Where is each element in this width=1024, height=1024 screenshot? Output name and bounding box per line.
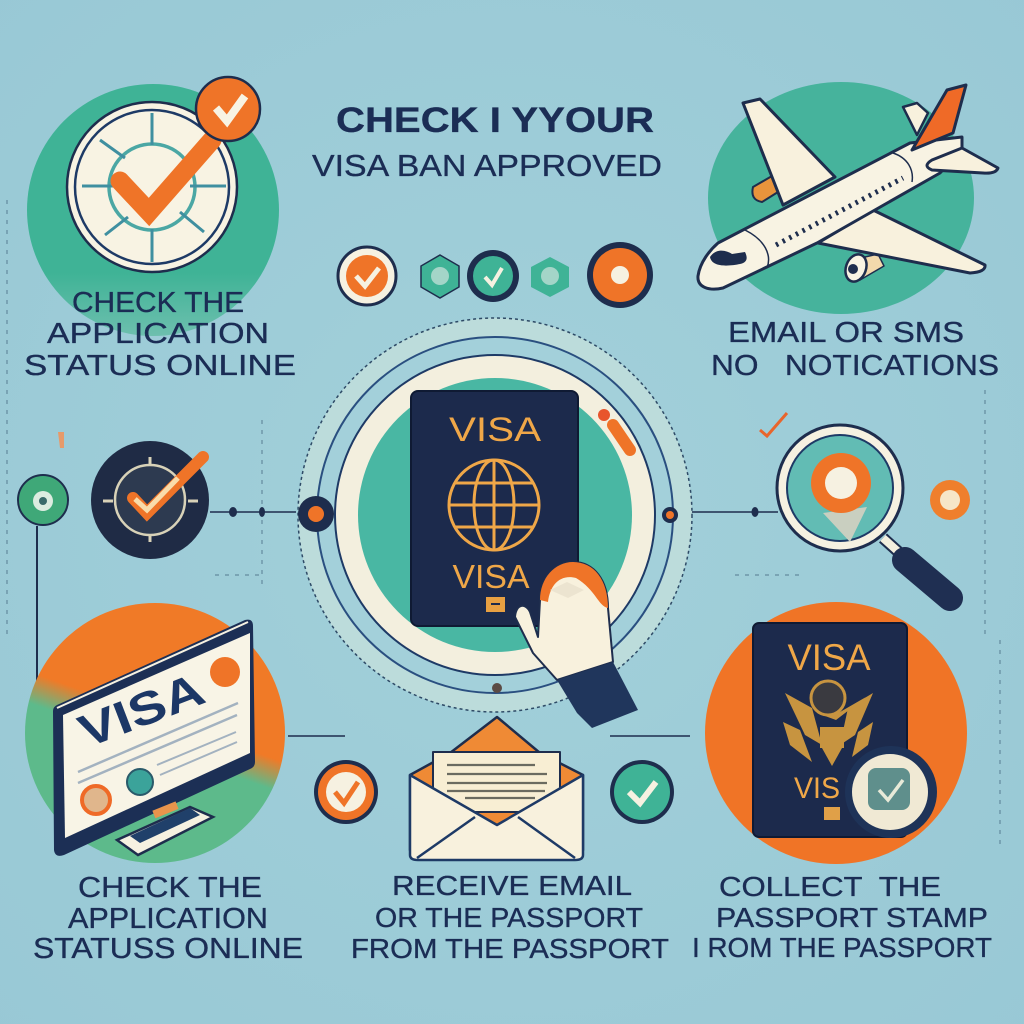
icon: green circle with target and check mark	[27, 77, 279, 336]
panel: central visa passport	[298, 318, 692, 728]
icon: airplane on green circle	[698, 82, 998, 314]
label: check the application status online: APPLICATION	[68, 903, 268, 935]
label: collect the passport stamp: COLLECT THE	[719, 871, 941, 902]
title	[312, 101, 662, 183]
label: check the application status online	[24, 287, 296, 382]
passport cover	[411, 391, 578, 626]
label: receive email: OR THE PASSPORT	[375, 902, 643, 933]
title: VISA BAN APPROVED	[312, 148, 662, 183]
label: email or sms notifications	[711, 317, 999, 382]
panel: email or sms notifications	[698, 82, 999, 382]
icon: hand pressing passport	[515, 562, 638, 728]
label: receive email: RECEIVE EMAIL	[392, 870, 632, 901]
passport cover: VISA	[449, 411, 541, 449]
icon: passport on orange circle	[705, 602, 967, 864]
title: CHECK I YYOUR	[336, 101, 654, 140]
label: email or sms notifications: NO NOTICATIONS	[711, 350, 999, 382]
label: check the application status online: CHECK THE	[72, 287, 244, 319]
concentric rings	[298, 318, 692, 712]
label: email or sms notifications: EMAIL OR SMS	[728, 317, 964, 349]
passport cover: VISA	[452, 558, 530, 595]
icon: magnifying glass with pin	[760, 413, 970, 598]
label: receive email	[351, 870, 669, 964]
label: check the application status online: CHECK THE	[78, 872, 262, 904]
icon: orange and green circle with monitor: VISA	[71, 662, 211, 758]
label: collect the passport stamp	[692, 871, 992, 963]
label: check the application status online: STATUS ONLINE	[24, 350, 296, 382]
row of status badges	[338, 242, 653, 308]
icon: passport on orange circle: VISA	[788, 637, 871, 678]
label: receive email: FROM THE PASSPORT	[351, 933, 669, 964]
label: check the application status online: STATUSS ONLINE	[33, 933, 303, 965]
icon: orange and green circle with monitor	[25, 603, 285, 863]
label: check the application status online: APPLICATION	[47, 318, 269, 350]
label: check the application status online	[33, 872, 303, 965]
panel: receive email	[314, 717, 674, 964]
icon: passport on orange circle: VIS	[794, 772, 840, 805]
icon: right check badge	[610, 760, 674, 824]
panel: check status online	[24, 77, 296, 382]
label: collect the passport stamp: I ROM THE PASSPORT	[692, 932, 992, 963]
icon: left check badge	[18, 432, 334, 559]
icon: open envelope	[410, 717, 583, 860]
panel: collect stamped passport	[692, 602, 992, 963]
label: collect the passport stamp: PASSPORT STAMP	[716, 902, 988, 933]
icon: left check badge	[314, 760, 378, 824]
panel: visa on monitor	[25, 603, 303, 965]
